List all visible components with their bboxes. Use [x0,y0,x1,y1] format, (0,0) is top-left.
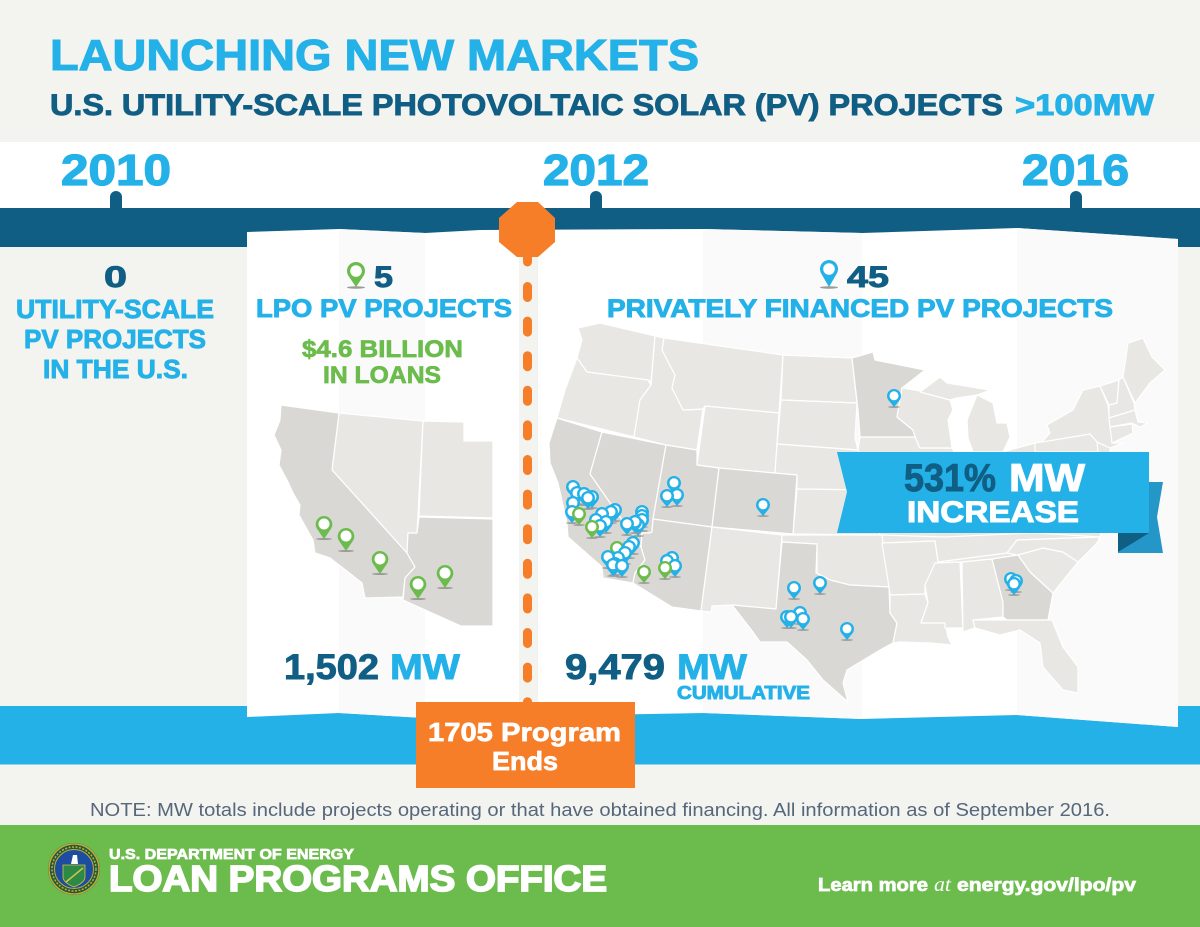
stat: 9,479 MW cumulative: CUMULATIVE [677,683,810,703]
pins: MN, CO, TX, GA [756,389,1023,641]
stat: 1,502 MW: 1,502 [284,648,379,687]
banner: 531% MW increase: 531% [904,457,996,500]
note: NOTE: MW totals include projects operating or that have obtained financing. All information as of September 2016. [90,800,1110,820]
footer: energy.gov/lpo/pv [957,875,1136,895]
footer: Learn more [818,875,928,895]
map: California, Nevada, Utah, Arizona [274,405,493,626]
panel: LPO PV projects heading: 5 [374,261,393,294]
panel: 2010 zero projects: UTILITY-SCALE [16,294,214,324]
panel: LPO PV projects heading: $4.6 BILLION [302,336,463,363]
stat: 9,479 MW cumulative: 9,479 [565,648,665,687]
title: LAUNCHING NEW MARKETS [50,31,699,80]
folded paper panel [247,228,1178,727]
callout: 1705 Program Ends: Ends [492,746,558,776]
timeline road with dashes [519,250,538,706]
year 2010: 2010 [61,146,171,195]
panel: privately financed heading: 45 [847,261,889,294]
icon: blue pin [820,260,838,289]
icon: green pin [347,262,365,289]
year 2012: 2012 [543,146,649,195]
banner: 531% MW increase: MW [1009,457,1085,500]
panel: privately financed heading [607,260,1113,323]
panel: 2010 zero projects: 0 [104,261,127,294]
banner: 531% MW increase: INCREASE [907,496,1079,529]
footer [0,825,1200,927]
stat: 1,502 MW [284,648,460,687]
stat: 9,479 MW cumulative: MW [677,648,747,687]
panel: 2010 zero projects: PV PROJECTS [24,324,206,354]
footer: LOAN PROGRAMS OFFICE [109,858,607,899]
callout: 1705 Program Ends [416,702,635,788]
icon: DOE seal [48,843,100,895]
stop sign octagon [499,202,555,257]
stat: 1,502 MW: MW [390,648,460,687]
panel: privately financed heading: PRIVATELY FINANCED PV PROJECTS [607,295,1113,323]
panel: 2010 zero projects [16,261,214,384]
pins: Southwest cluster [565,476,684,584]
panel: 2010 zero projects: IN THE U.S. [43,354,188,384]
footer: U.S. DEPARTMENT OF ENERGY [109,846,354,863]
callout: 1705 Program Ends: 1705 Program [428,717,621,747]
subtitle: U.S. UTILITY-SCALE PHOTOVOLTAIC SOLAR (PV) PROJECTS [50,89,1003,122]
panel: LPO PV projects heading: IN LOANS [323,362,441,389]
year 2016: 2016 [1022,146,1129,195]
footer: at [934,874,951,896]
panel: LPO PV projects heading [256,261,512,389]
map: United States [549,323,1165,702]
panel: LPO PV projects heading: LPO PV PROJECTS [256,295,512,323]
bottom blue band [0,706,1200,764]
banner: 531% MW increase [837,452,1163,553]
subtitle: >100MW [1015,89,1155,122]
stat: 9,479 MW cumulative [565,648,810,703]
timeline band [0,142,1200,247]
